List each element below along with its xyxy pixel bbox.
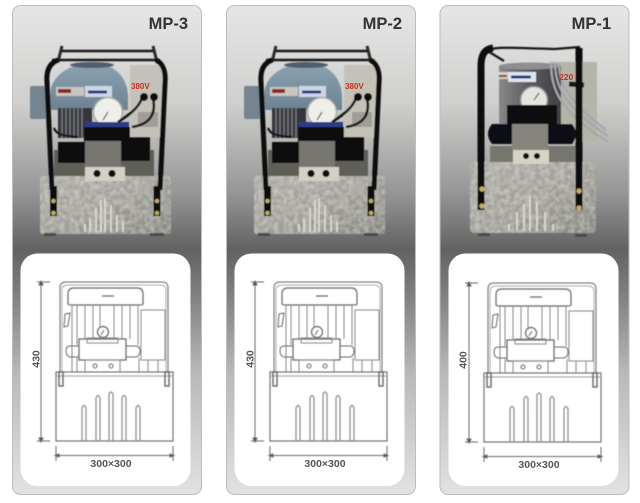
photo: MP-1 pump: [470, 47, 608, 237]
diagram: MP-2 dimensions: 300×300: [304, 458, 346, 470]
diagram: MP-3 dimensions: 300×300: [90, 458, 132, 470]
diagram: MP-3 dimensions: 430: [30, 350, 42, 368]
heading: MP-1: MP-1: [572, 15, 611, 33]
photo: MP-2 pump: 380V: [345, 82, 364, 91]
panel: MP-1: [440, 6, 629, 494]
photo: MP-3 pump: [30, 46, 171, 236]
heading: MP-3: MP-3: [149, 15, 188, 33]
panel: MP-2: [226, 6, 416, 494]
panel: MP-3: [12, 6, 202, 494]
diagram: MP-1 dimensions: 400: [458, 351, 470, 369]
heading: MP-2: MP-2: [363, 15, 402, 33]
panel: MP-3 drawing card: [20, 254, 190, 486]
diagram: MP-1 dimensions: 300×300: [518, 459, 560, 471]
photo: MP-2 pump: [244, 46, 385, 236]
diagram: MP-1 dimensions: [458, 282, 602, 471]
diagram: MP-2 dimensions: [244, 281, 388, 470]
diagram: MP-3 dimensions: [30, 281, 174, 470]
panel: MP-2 drawing card: [234, 254, 404, 486]
panel: MP-1 drawing card: [448, 254, 618, 486]
photo: MP-1 pump: 220: [559, 72, 573, 82]
photo: MP-3 pump: 380V: [131, 82, 150, 91]
diagram: MP-2 dimensions: 430: [244, 350, 256, 368]
